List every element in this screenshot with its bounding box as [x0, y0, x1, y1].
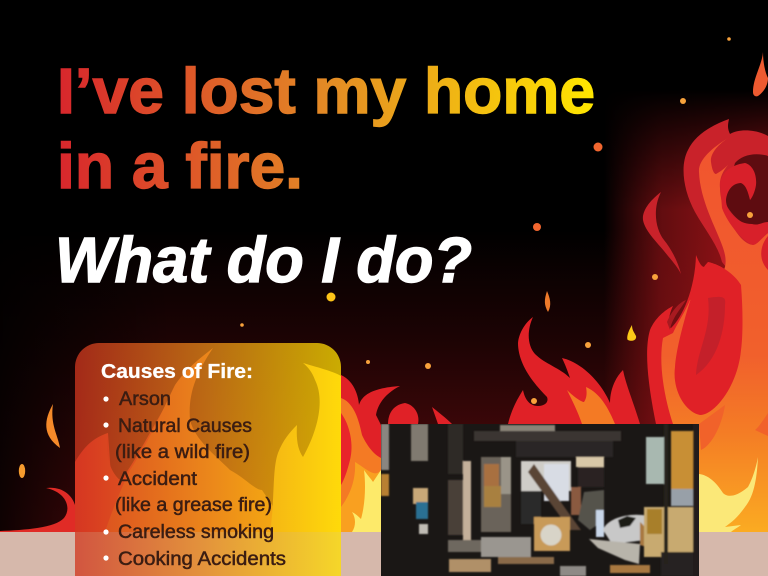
subtitle: What do I do?: What do I do? [55, 224, 472, 296]
list: causes: Arson [119, 389, 171, 410]
list: causes: Cooking Accidents [118, 549, 286, 570]
side red blob [761, 236, 768, 270]
orange body [661, 138, 768, 532]
red blob [675, 262, 742, 415]
list: causes [115, 389, 286, 570]
flames: left of photo [341, 375, 452, 532]
flames: centre [508, 317, 640, 424]
list: causes: Accident [118, 469, 198, 490]
flames: right swirl [643, 119, 768, 532]
list bullets [103, 396, 109, 561]
title: I've lost my home in a fire [57, 55, 595, 202]
heading: causes of fire: Causes of Fire: [101, 361, 253, 383]
bright red swirl [720, 163, 768, 245]
title: I've lost my home in a fire: I’ve lost my home [57, 55, 595, 127]
bottom pale strip [0, 532, 768, 576]
outer dark red swirl [684, 119, 768, 272]
list: causes: (like a grease fire) [115, 495, 272, 516]
list: causes: Natural Causes [118, 416, 252, 437]
thin flame [643, 192, 681, 274]
flames: behind causes panel [0, 348, 341, 532]
flames: right orange base [699, 405, 768, 532]
swirl pocket [724, 154, 768, 230]
photo: burned house interior [381, 424, 699, 576]
embers [19, 37, 768, 478]
dark streak in blob [696, 297, 725, 375]
lower red flame [647, 255, 741, 424]
list: causes: (like a wild fire) [115, 442, 250, 463]
panel: causes of fire [75, 343, 341, 576]
title: I've lost my home in a fire: in a fire. [57, 130, 303, 202]
dark patch [667, 300, 686, 330]
list: causes: Careless smoking [118, 522, 274, 543]
